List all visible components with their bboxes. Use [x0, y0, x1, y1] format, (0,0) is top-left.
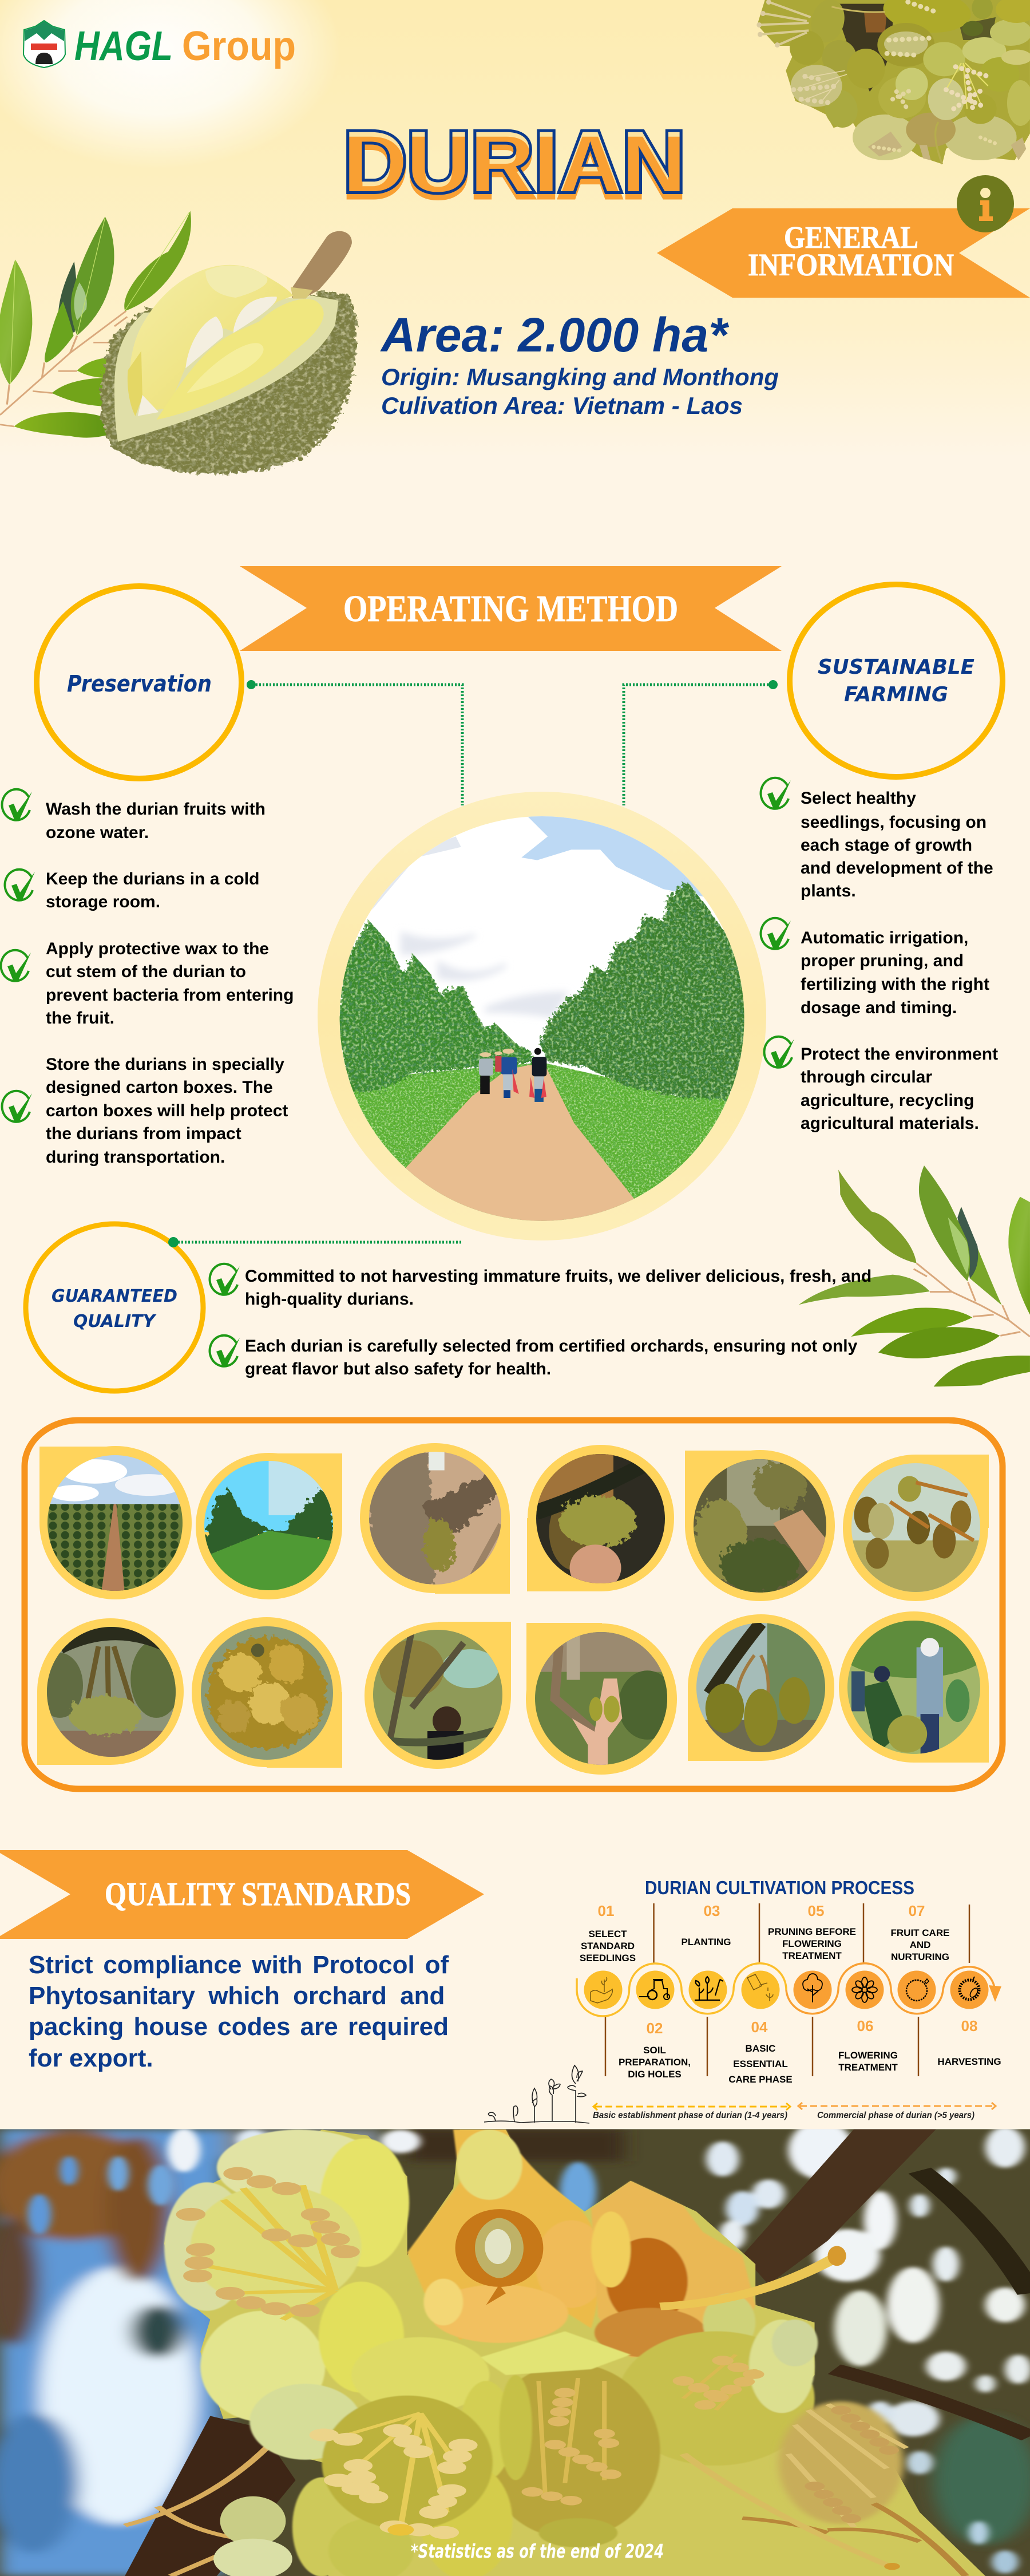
step 8: 08: [961, 2017, 977, 2034]
phase timeline: commercial: Commercial phase of durian (>5 years): [817, 2111, 974, 2120]
list: sustainable farming steps: each stage of growth: [801, 836, 972, 855]
step 3: 03: [704, 1902, 720, 1919]
list: guaranteed quality points: high-quality durians.: [245, 1290, 414, 1309]
list: sustainable farming steps: [761, 778, 998, 1133]
step 5: TREATMENT: [782, 1950, 842, 1961]
step 8: [937, 1970, 1001, 2067]
step 7: NURTURING: [891, 1951, 949, 1962]
upper flesh: [129, 265, 293, 416]
list: preservation steps: Keep the durians in a cold: [46, 870, 259, 888]
circle label: preservation: Preservation: [67, 671, 212, 697]
left trees: [338, 920, 532, 1092]
list: sustainable farming steps: seedlings, focusing on: [801, 813, 987, 832]
step 5: PRUNING BEFORE: [768, 1926, 856, 1937]
text block: quality standards description: [29, 1951, 449, 2072]
photo: flower cluster in hand: [527, 1445, 674, 1591]
circle label: preservation: [37, 586, 241, 779]
list: preservation steps: the durians from impact: [46, 1124, 241, 1143]
flower stamens: [759, 2, 811, 46]
text block: quality standards description: packing house codes are required: [29, 2013, 449, 2041]
process title: DURIAN CULTIVATION PROCESS: [645, 1877, 914, 1898]
step 4: BASIC: [746, 2043, 775, 2054]
phase timeline: basic establishment: Basic establishment phase of durian (1-4 years): [593, 2111, 787, 2120]
step 2: SOIL: [643, 2045, 666, 2056]
photo: aerial orchard rows: [39, 1446, 192, 1599]
banner text: INFORMATION: [748, 247, 954, 282]
blossom mass: [164, 2129, 985, 2576]
banner: operating method: OPERATING METHOD: [343, 588, 678, 630]
illustration: sprout growth line: [484, 2065, 589, 2123]
list: sustainable farming steps: and development of the: [801, 859, 993, 878]
panel: photo gallery: [25, 1420, 1003, 1789]
flower petals: [806, 0, 849, 46]
step 4: [728, 1970, 793, 2085]
lower flesh: [156, 299, 324, 420]
step 7: 07: [909, 1902, 925, 1919]
step 6: [838, 1970, 898, 2073]
photo: young durian fruits: [843, 1455, 989, 1601]
step 1: STANDARD: [581, 1941, 635, 1951]
list: sustainable farming steps: Protect the environment: [801, 1045, 998, 1064]
photo: mature durians on branch: [688, 1614, 834, 1761]
list: guaranteed quality points: Committed to not harvesting immature fruits, we deliver delicious, fresh, and: [245, 1267, 871, 1286]
photo: durian flowers top right: [757, 0, 1030, 164]
cream rim: [114, 296, 339, 442]
flower: lower right stamens: [778, 2401, 903, 2524]
text block: area and origin: Culivation Area: Vietnam - Laos: [381, 392, 743, 419]
banner: quality standards: QUALITY STANDARDS: [105, 1875, 411, 1913]
illustration: opened durian fruit: [100, 231, 357, 474]
text block: quality standards description: for export.: [29, 2044, 153, 2072]
title: DURIAN: DURIAN: [343, 118, 686, 215]
step 7: AND: [910, 1939, 930, 1950]
list: guaranteed quality points: [210, 1264, 871, 1378]
connector: sustainable farming to photo: [624, 680, 778, 805]
spiky husk: [100, 290, 357, 474]
step 4: CARE PHASE: [728, 2074, 793, 2085]
list: preservation steps: Apply protective wax to the: [46, 939, 269, 958]
photo: young orchard and sky: [196, 1453, 342, 1599]
step 1: 01: [598, 1902, 614, 1919]
list: sustainable farming steps: Automatic irrigation,: [801, 929, 968, 947]
branches: [742, 2129, 936, 2285]
photo: worker in durian tree: [365, 1622, 511, 1769]
text block: area and origin: Area: 2.000 ha*: [380, 308, 729, 362]
text block: quality standards description: Strict compliance with Protocol of: [29, 1951, 449, 1979]
banner: operating method: [240, 566, 782, 651]
title: DURIAN: DURIAN: [343, 113, 686, 210]
white pulp: [138, 297, 277, 416]
circle label: guaranteed quality: QUALITY: [73, 1311, 157, 1332]
photo: hand holding flower buds: [685, 1450, 835, 1601]
list: preservation steps: ozone water.: [46, 823, 149, 842]
illustration: leaves branch left: [0, 211, 191, 438]
flower: large left bloom: [164, 2129, 409, 2422]
brand name: [74, 23, 296, 69]
photo: durian orchard path with workers: [318, 792, 766, 1240]
photo: yellow flower bunch: [192, 1617, 342, 1768]
text block: area and origin: Origin: Musangking and Monthong: [381, 364, 779, 390]
fruit stem: [292, 231, 352, 299]
chart: durian cultivation process: [577, 1877, 1001, 2085]
step 5: FLOWERING: [782, 1938, 842, 1949]
step 6: TREATMENT: [838, 2062, 898, 2073]
list: preservation steps: designed carton boxes. The: [46, 1078, 273, 1097]
list: preservation steps: Wash the durian fruits with: [46, 800, 266, 819]
text block: area and origin: [380, 308, 779, 419]
step 3: PLANTING: [682, 1937, 731, 1947]
step 8: HARVESTING: [937, 2056, 1001, 2067]
list: sustainable farming steps: Select healthy: [801, 789, 916, 808]
photo: small fruits on palm: [526, 1623, 677, 1775]
phase timeline: basic establishment: [593, 2103, 790, 2120]
list: preservation steps: carton boxes will help protect: [46, 1101, 288, 1120]
brand name: HAGL: [74, 23, 173, 69]
list: guaranteed quality points: great flavor but also safety for health.: [245, 1360, 551, 1378]
list: sustainable farming steps: through circular: [801, 1068, 932, 1086]
list: preservation steps: [1, 789, 294, 1167]
list: sustainable farming steps: proper pruning, and: [801, 951, 964, 970]
step 5: [768, 1902, 856, 2009]
circle label: guaranteed quality: GUARANTEED: [52, 1286, 177, 1306]
phase timeline: commercial: [798, 2103, 996, 2120]
step 4: ESSENTIAL: [733, 2059, 788, 2069]
circle label: sustainable farming: FARMING: [844, 683, 948, 706]
small bud and left stems: [125, 2445, 270, 2576]
step 3: [682, 1902, 731, 2009]
banner text: [748, 220, 954, 282]
list: guaranteed quality points: Each durian is carefully selected from certified orchards, ensuring not only: [245, 1337, 858, 1356]
background bokeh: [0, 2129, 1030, 2576]
list: sustainable farming steps: dosage and timing.: [801, 998, 957, 1017]
brand name: Group: [182, 23, 296, 69]
step 7: FRUIT CARE: [891, 1927, 949, 1938]
text block: quality standards description: Phytosanitary which orchard and: [29, 1982, 445, 2010]
list: sustainable farming steps: plants.: [801, 882, 856, 900]
photo: hanging buds: [37, 1618, 184, 1765]
list: preservation steps: storage room.: [46, 892, 160, 911]
step 6: 06: [857, 2017, 873, 2034]
footnote: statistics: *Statistics as of the end of 2024: [411, 2540, 664, 2562]
list: preservation steps: prevent bacteria from entering: [46, 986, 294, 1005]
process wave line: [577, 1963, 1001, 2016]
connector: preservation to photo: [247, 680, 462, 805]
step 7: [891, 1902, 949, 2009]
banner text: GENERAL: [784, 220, 918, 255]
icon: info circle: [957, 175, 1014, 232]
illustration: leaves branch right: [799, 1165, 1030, 1386]
circle label: sustainable farming: SUSTAINABLE: [818, 655, 974, 679]
icon: HAGL shield: [23, 21, 65, 68]
list: sustainable farming steps: agricultural materials.: [801, 1114, 979, 1133]
list: preservation steps: during transportation.: [46, 1148, 225, 1167]
step 1: SELECT: [588, 1929, 627, 1939]
step 5: 05: [808, 1902, 824, 1919]
list: preservation steps: Store the durians in specially: [46, 1055, 284, 1074]
list: sustainable farming steps: agriculture, recycling: [801, 1091, 974, 1110]
step 2: 02: [647, 2020, 663, 2037]
list: preservation steps: cut stem of the durian to: [46, 962, 246, 981]
step 1: [580, 1902, 636, 2009]
flower: lower center bloom: [480, 2320, 818, 2547]
step 2: PREPARATION,: [619, 2057, 691, 2068]
flower: center orange bloom: [407, 2129, 608, 2343]
banner: quality standards: [0, 1850, 484, 1939]
step 2: DIG HOLES: [628, 2069, 682, 2080]
connector: guaranteed quality: [178, 1241, 462, 1243]
step 2: [619, 1970, 691, 2080]
photo: flowers on trunk: [360, 1443, 510, 1594]
banner: general information: [657, 175, 1030, 298]
step 4: 04: [751, 2018, 768, 2036]
dirt road: [406, 1065, 634, 1221]
grass: [349, 1064, 730, 1221]
flower: right orange bloom: [591, 2181, 755, 2357]
photo: farmers with harvested durians: [834, 1611, 993, 1763]
list: sustainable farming steps: fertilizing with the right: [801, 975, 989, 994]
photo: durian blossoms close-up: [0, 2121, 1030, 2576]
right trees: [540, 881, 750, 1099]
logo: HAGL Group: [23, 21, 296, 69]
step 6: FLOWERING: [838, 2050, 898, 2061]
title: DURIAN: DURIAN: [343, 119, 686, 215]
workers: [479, 1048, 546, 1102]
list: preservation steps: the fruit.: [46, 1009, 114, 1028]
step 1: SEEDLINGS: [580, 1953, 636, 1963]
circle label: guaranteed quality: [26, 1224, 203, 1391]
circle label: sustainable farming: [790, 584, 1003, 777]
